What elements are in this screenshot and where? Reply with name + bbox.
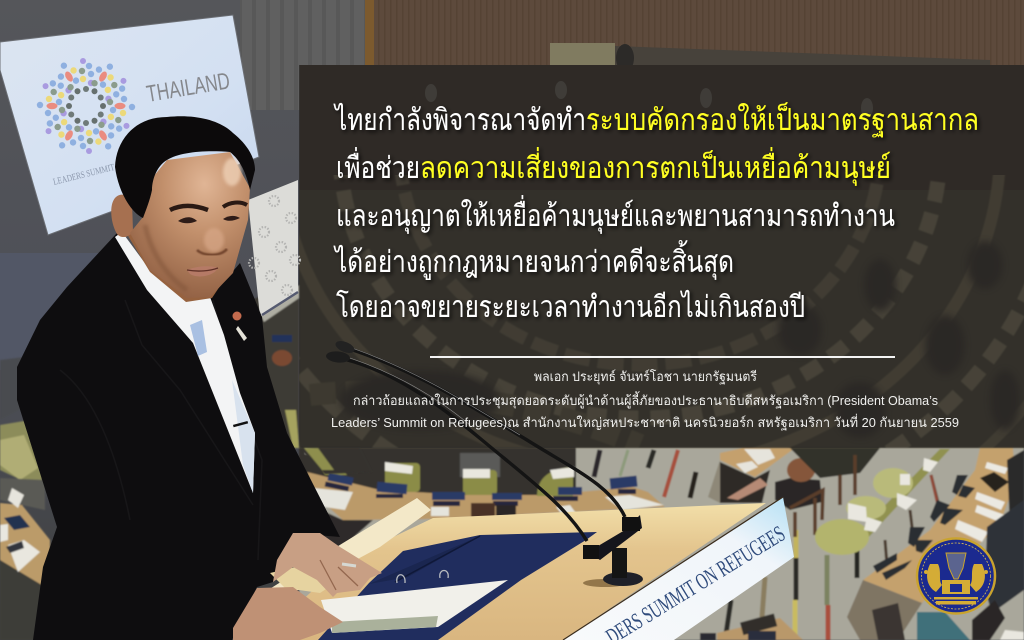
speaker: Prime Minister at the podium <box>17 116 382 640</box>
summit caption: LEADERS SUMMIT ON <box>52 160 128 188</box>
screen: Thailand logo display <box>0 15 259 235</box>
microphones <box>325 339 643 587</box>
floor stripes <box>594 450 600 477</box>
floor and delegates' desks below the panel <box>299 448 1024 640</box>
line 1 <box>333 101 979 138</box>
line 5: โดยอาจขยายระยะเวลาทำงานอีกไม่เกินสองปี <box>336 289 805 324</box>
podium with folder and sign <box>260 497 794 640</box>
line 3: และอนุญาตให้เหยื่อค้ามนุษย์และพยานสามารถทำงาน <box>336 195 895 235</box>
THAILAND wordmark: THAILAND <box>145 67 232 107</box>
line 2: เพื่อช่วย <box>336 147 420 185</box>
mic stand <box>583 579 627 587</box>
line 2 <box>336 147 891 187</box>
line 1: ไทยกำลังพิจารณาจัดทำ <box>333 102 586 137</box>
navy folder <box>318 532 597 640</box>
desk with seated delegate <box>708 460 720 503</box>
lower hand <box>233 587 343 640</box>
panel: dark translucent backdrop <box>299 65 1024 448</box>
lapel pin <box>232 312 242 320</box>
right desk <box>863 448 1015 603</box>
left wall: screen, seats and desks <box>0 285 372 640</box>
bottom desk with display <box>717 618 803 640</box>
podium wood top <box>260 503 766 640</box>
eyebrows <box>170 206 208 210</box>
icon: leaders summit dotted flower logo <box>37 58 135 154</box>
jacket <box>17 233 340 640</box>
cream rolled podium edge <box>268 498 431 590</box>
nose <box>197 249 227 255</box>
lapel shading <box>60 300 262 560</box>
second backdrop screen with repeated logos <box>248 180 300 317</box>
necktie <box>190 320 207 356</box>
upper hand <box>273 533 382 597</box>
hair <box>115 116 255 218</box>
face <box>130 152 250 298</box>
eyes <box>178 217 197 223</box>
line 2: ลดความเสี่ยงของการตกเป็นเหยื่อค้ามนุษย์ <box>420 147 891 187</box>
strip of delegates right of the speaker <box>250 285 299 448</box>
divider rule <box>430 356 895 358</box>
cream edge under hands <box>270 560 340 593</box>
neck <box>122 226 232 302</box>
speaker name: พลเอก ประยุทธ์ จันทร์โอชา นายกรัฐมนตรี <box>534 369 757 385</box>
mouth <box>187 266 218 276</box>
delegate chairs in olive <box>857 449 950 540</box>
sign: leaders summit on refugees <box>563 497 794 640</box>
cheek shadow <box>145 225 187 290</box>
chairs <box>313 452 573 496</box>
event line 1: กล่าวถ้อยแถลงในการประชุมสุดยอดระดับผู้นำด้านผู้ลี้ภัยของประธานาธิบดีสหรัฐอเมริกา (President Obama’s <box>353 391 938 409</box>
name displays <box>327 473 638 500</box>
delegates' desk row <box>307 472 665 520</box>
teal chair <box>917 612 970 640</box>
line 4: ได้อย่างถูกกฎหมายจนกว่าคดีจะสิ้นสุด <box>333 240 734 281</box>
headline text block <box>333 101 979 324</box>
forehead highlight <box>223 158 241 186</box>
ear <box>111 195 133 237</box>
icon: Royal Thai Government seal <box>917 538 995 614</box>
shirt <box>115 232 255 493</box>
attribution text block <box>331 369 959 431</box>
event line 2: Leaders’ Summit on Refugees)ณ สำนักงานใหญ่สหประชาชาติ นครนิวยอร์ก สหรัฐอเมริกา วันที่ 20 กันยายน 2559 <box>331 414 959 431</box>
papers in binder <box>321 580 508 633</box>
